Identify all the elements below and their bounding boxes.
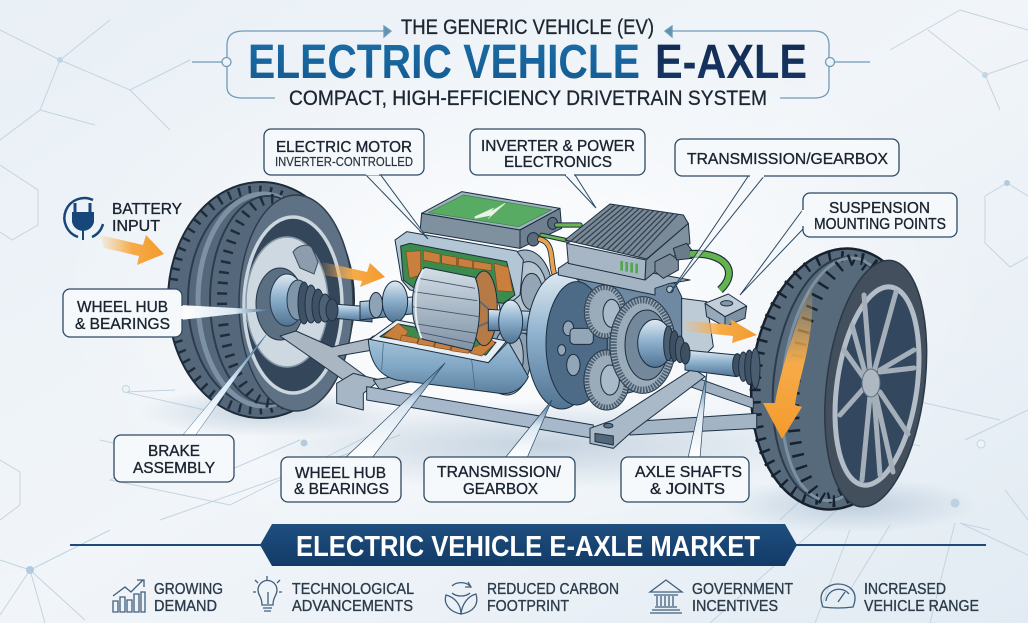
battery input text: BATTERY xyxy=(112,201,182,218)
large output gear xyxy=(610,297,675,393)
gearbox rear casing xyxy=(567,273,685,397)
market banner: ELECTRIC VEHICLE E-AXLE MARKET xyxy=(296,531,760,563)
right tyre xyxy=(737,238,940,520)
driver: technological advancements xyxy=(253,576,414,615)
suspension mount xyxy=(705,294,747,327)
icon: light bulb xyxy=(253,576,282,611)
ground shadows xyxy=(140,387,980,533)
callout: wheel hub left: & BEARINGS xyxy=(75,316,170,333)
energy flow arrow: battery input xyxy=(100,235,164,265)
callout: transmission gearbox top: TRANSMISSION/GEARBOX xyxy=(687,151,888,168)
callout: wheel hub bottom: WHEEL HUB xyxy=(295,465,386,482)
icon: leaves with recycle arrows xyxy=(445,582,477,614)
callout: inverter and power electronics: ELECTRONICS xyxy=(504,154,612,171)
title frame with arrows xyxy=(192,26,870,98)
driver: increased vehicle range: VEHICLE RANGE xyxy=(864,598,979,615)
callout: wheel hub bottom: & BEARINGS xyxy=(294,481,389,498)
energy flow arrow: to wheel xyxy=(683,319,757,343)
left wheel xyxy=(168,182,354,418)
hub xyxy=(256,268,309,340)
lower windings xyxy=(383,323,495,356)
right wheel xyxy=(737,238,940,520)
callout: axle shafts and joints xyxy=(621,372,749,502)
callout: transmission gearbox bottom xyxy=(424,400,575,502)
driver: reduced carbon footprint: FOOTPRINT xyxy=(487,598,569,615)
driver: technological advancements: TECHNOLOGICAL xyxy=(292,581,414,598)
gearbox housing ring xyxy=(527,272,597,409)
battery input text: INPUT xyxy=(112,218,160,235)
left axle shaft and boot xyxy=(298,282,372,324)
title block xyxy=(192,16,870,110)
callout: electric motor xyxy=(264,129,428,239)
callout: inverter and power electronics: INVERTER & POWER xyxy=(481,138,635,155)
center shaft xyxy=(488,309,537,331)
output shaft and boot xyxy=(638,319,760,388)
planet bearings xyxy=(558,321,593,376)
main title: E-AXLE xyxy=(655,36,807,89)
brake disc xyxy=(246,237,328,367)
market banner xyxy=(70,524,986,566)
pre-title: THE GENERIC VEHICLE (EV) xyxy=(401,16,654,39)
driver: growing demand: GROWING xyxy=(154,581,223,598)
spokes xyxy=(840,292,914,480)
battery module xyxy=(420,192,562,248)
callout: wheel hub left: WHEEL HUB xyxy=(77,299,168,316)
callout: suspension mounting points: SUSPENSION xyxy=(829,200,930,217)
callout: axle shafts and joints: AXLE SHAFTS xyxy=(635,464,742,481)
callout: wheel hub left xyxy=(63,289,272,337)
right rim xyxy=(823,281,931,491)
rotor xyxy=(412,267,497,351)
coolant and power cables xyxy=(540,225,580,278)
energy flow arrow: wheel rotation xyxy=(763,290,812,439)
subtitle: COMPACT, HIGH-EFFICIENCY DRIVETRAIN SYSTEM xyxy=(289,87,767,110)
callout: inverter and power electronics xyxy=(470,129,645,208)
driver: government incentives xyxy=(650,580,793,615)
driver: growing demand: DEMAND xyxy=(154,598,217,615)
callout: transmission gearbox top xyxy=(670,139,899,293)
driver: growing demand xyxy=(113,580,223,615)
stator copper windings xyxy=(406,251,513,292)
callout: wheel hub bottom xyxy=(281,363,445,502)
brake caliper xyxy=(293,245,318,274)
callout: transmission gearbox bottom: TRANSMISSION/ xyxy=(437,464,562,481)
input shaft xyxy=(360,281,417,322)
icon: government building xyxy=(650,580,682,613)
right bracket xyxy=(682,298,713,367)
left wheel opening xyxy=(244,217,342,393)
e-axle machine xyxy=(360,192,760,410)
icon: growth chart xyxy=(113,580,145,612)
lower gear xyxy=(584,350,629,410)
callout: brake assembly: BRAKE xyxy=(148,443,200,460)
frame beams xyxy=(337,368,757,448)
inverter xyxy=(558,204,692,295)
market drivers row xyxy=(113,576,979,615)
main title: ELECTRIC VEHICLE xyxy=(248,36,640,89)
driver: increased vehicle range xyxy=(821,581,979,615)
callout: brake assembly xyxy=(114,335,266,482)
driver: reduced carbon footprint xyxy=(445,581,619,615)
callout: axle shafts and joints: & JOINTS xyxy=(650,481,725,498)
callout: brake assembly: ASSEMBLY xyxy=(133,460,215,477)
callout: electric motor: INVERTER-CONTROLLED xyxy=(275,155,413,169)
driver: technological advancements: ADVANCEMENTS xyxy=(292,598,413,615)
callout: suspension mounting points xyxy=(740,193,957,295)
callout: battery input xyxy=(64,198,182,240)
motor lower casing xyxy=(368,336,528,394)
callout: suspension mounting points: MOUNTING POINTS xyxy=(814,216,946,233)
driver: reduced carbon footprint: REDUCED CARBON xyxy=(487,581,619,598)
driver: increased vehicle range: INCREASED xyxy=(864,581,946,598)
left suspension arm xyxy=(280,331,373,386)
motor stator interior xyxy=(401,243,515,303)
driver: government incentives: INCENTIVES xyxy=(692,598,778,615)
icon: plug xyxy=(64,198,103,240)
motor end housings xyxy=(483,250,552,395)
energy flow arrow: to motor xyxy=(322,262,385,287)
green coolant tube xyxy=(690,254,729,290)
icon: gauge xyxy=(821,584,855,608)
gearbox face xyxy=(546,282,607,405)
callout: transmission gearbox bottom: GEARBOX xyxy=(463,481,538,498)
motor upper housing xyxy=(395,232,523,303)
callout: electric motor: ELECTRIC MOTOR xyxy=(276,139,412,156)
left tyre xyxy=(168,182,354,418)
upper gear xyxy=(584,285,626,338)
driver: government incentives: GOVERNMENT xyxy=(692,581,793,598)
